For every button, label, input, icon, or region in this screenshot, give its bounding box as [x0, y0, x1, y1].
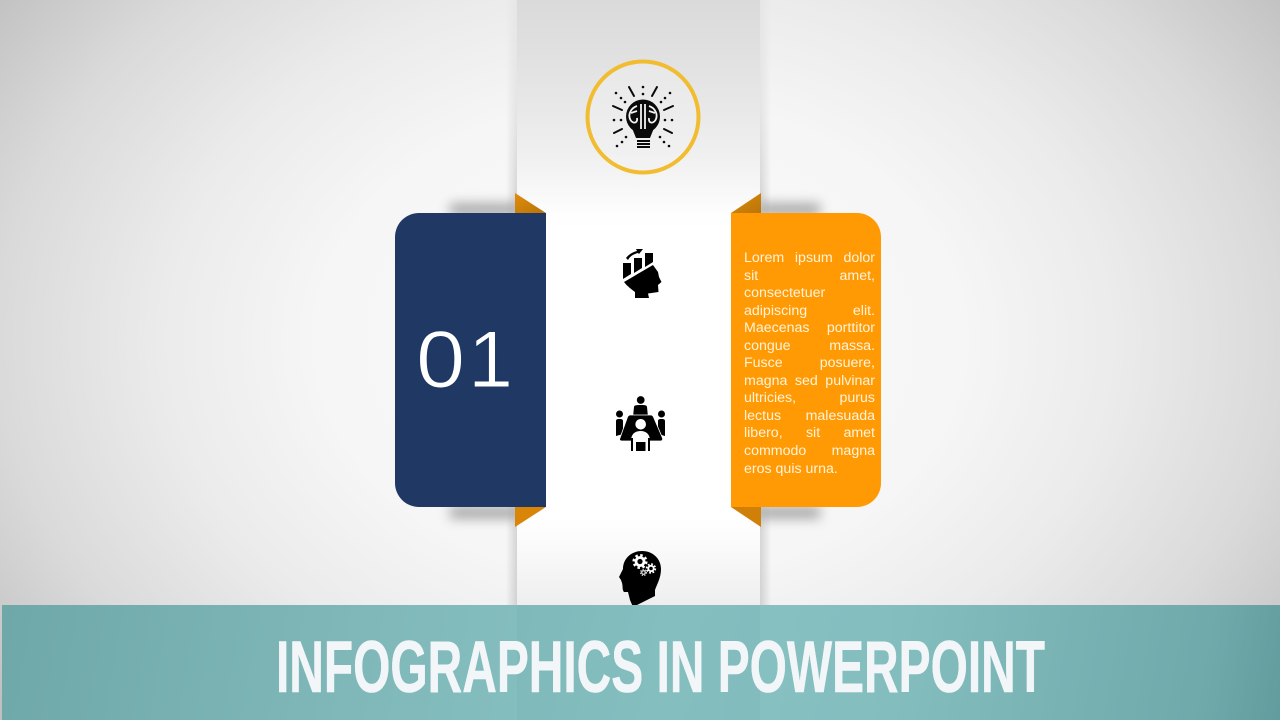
body text: adipiscing elit. [744, 303, 875, 319]
body text: Maecenas porttitor [744, 320, 875, 336]
body text: sit amet, [744, 268, 875, 284]
body text: Lorem ipsum dolor [744, 250, 875, 266]
body text: lectus malesuada [744, 408, 875, 424]
fold triangles [515, 193, 761, 527]
panel: navy number card [395, 213, 546, 507]
body text [744, 250, 876, 477]
body text: Fusce posuere, [744, 355, 875, 371]
panel: orange text card [731, 213, 881, 507]
number 01: 1 [468, 315, 513, 405]
icon: head with gears [619, 551, 661, 605]
number 01 [416, 313, 513, 405]
banner: teal title band [2, 605, 1280, 720]
body text: commodo magna [744, 443, 875, 459]
icon: meeting around a table [616, 396, 665, 451]
panel: central vertical strip [517, 0, 760, 720]
number 01: 0 [416, 313, 465, 404]
body text: magna sed pulvinar [744, 373, 875, 389]
body text: ultricies, purus [744, 390, 875, 406]
body text: eros quis urna. [744, 461, 838, 477]
icon: lightbulb with brain in yellow ring [586, 60, 700, 174]
body text: congue massa. [744, 338, 875, 354]
body text: libero, sit amet [744, 425, 875, 441]
icon: head with rising bars [623, 249, 662, 298]
body text: consectetuer [744, 285, 825, 301]
